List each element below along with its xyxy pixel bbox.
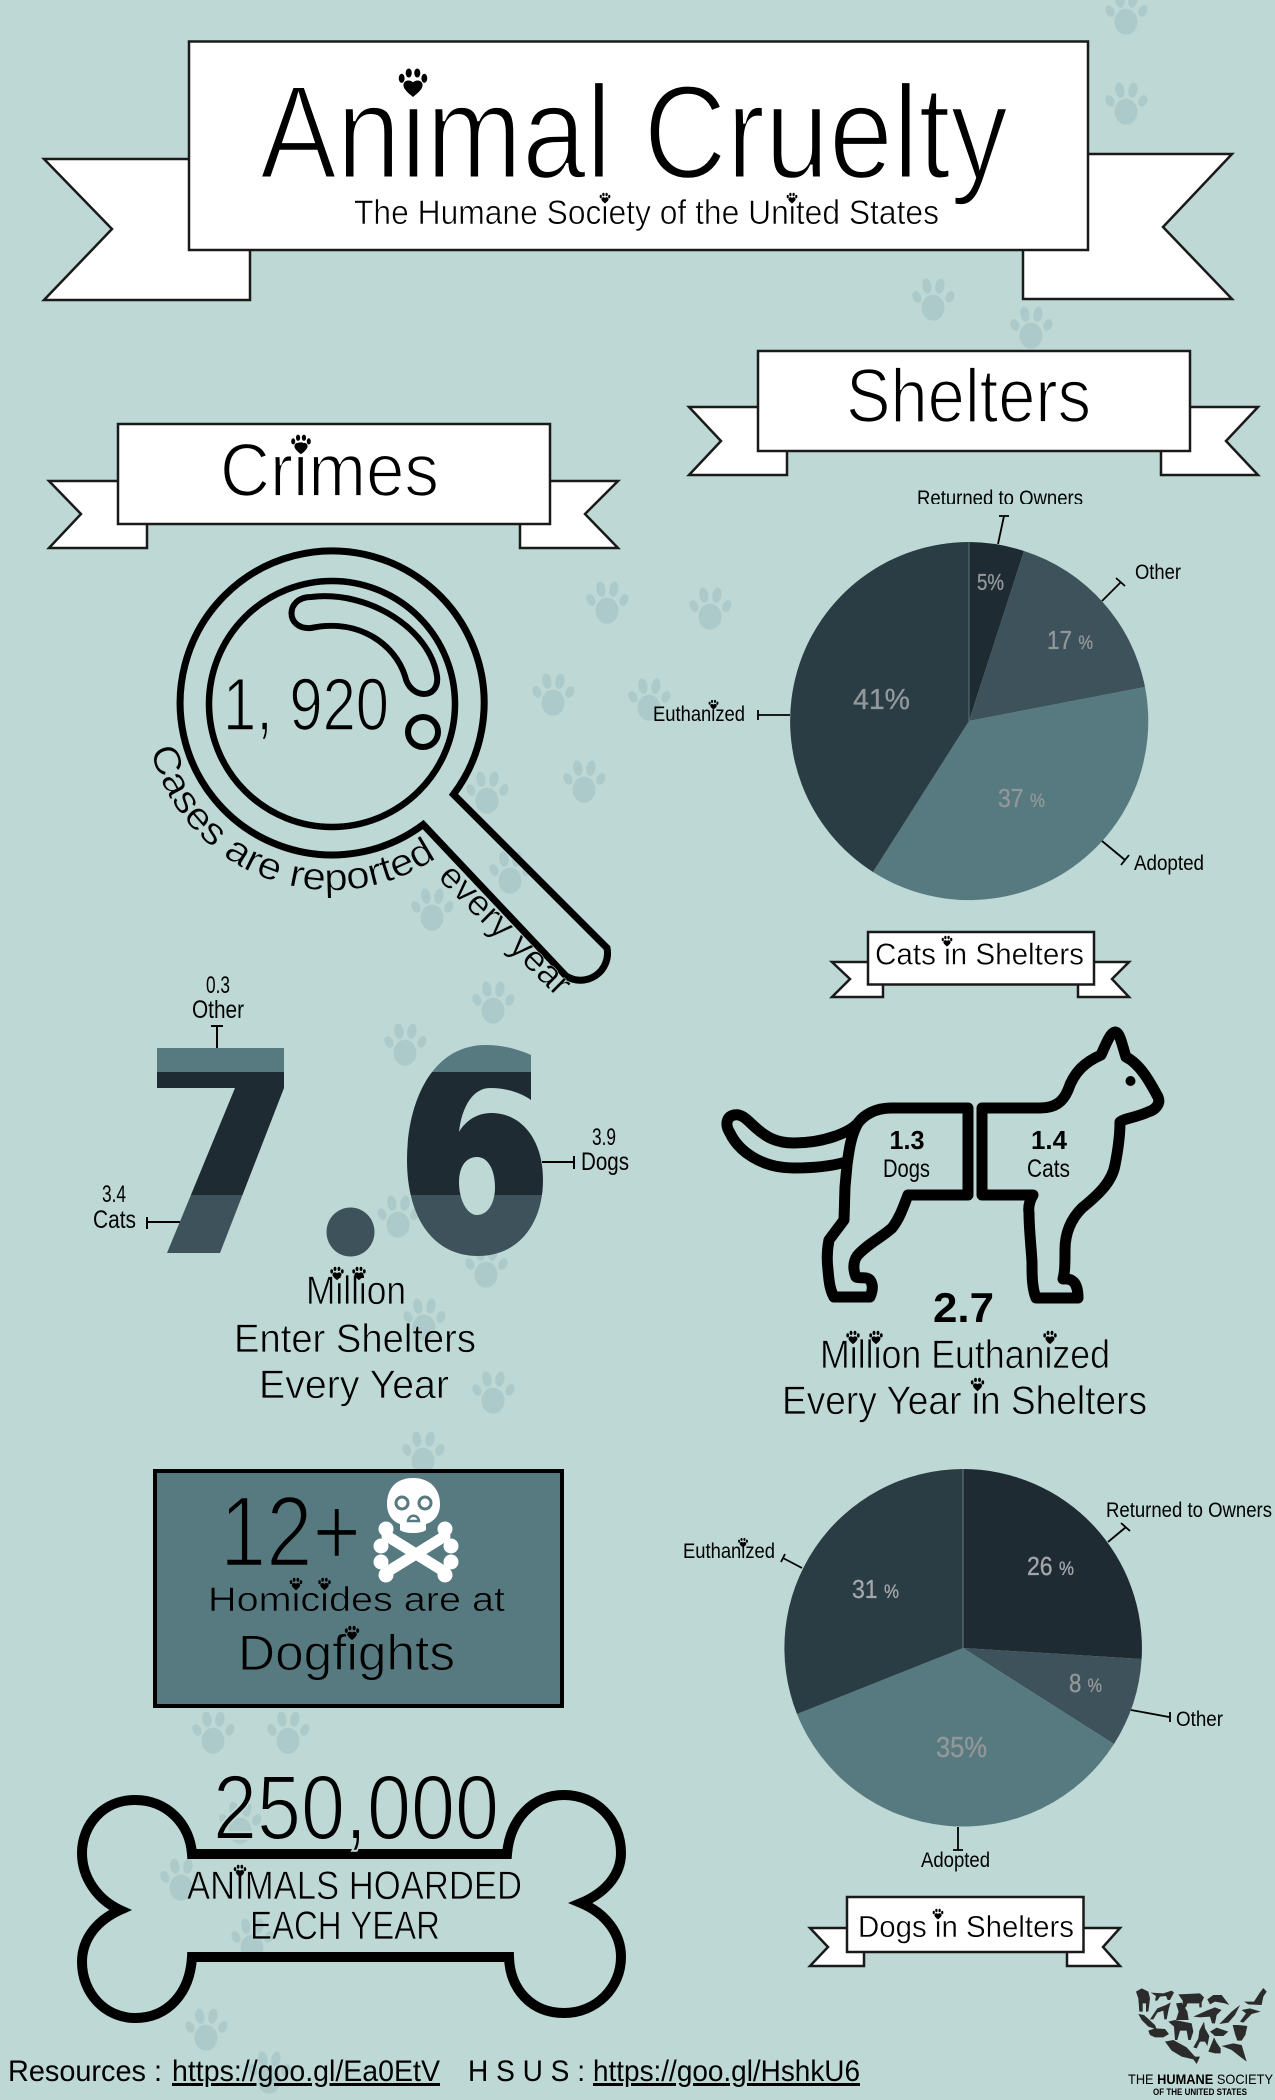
panel: dogfights — [155, 1471, 562, 1706]
pie labels: cats: Euthanized — [653, 703, 745, 726]
percent labels: 17 % — [1047, 625, 1093, 655]
pie chart: dogs in shelters — [784, 1469, 1142, 1827]
banner: dogs in shelters — [810, 1897, 1120, 1966]
label: other — [192, 972, 244, 1048]
caption: dogfights: Dogfights — [238, 1625, 455, 1681]
banner: cats in shelters — [832, 932, 1129, 997]
caption: animals hoarded: EACH YEAR — [250, 1904, 440, 1948]
caption: homicides: Homicides are at — [208, 1581, 506, 1619]
logo animals map — [1136, 1988, 1267, 2064]
percent labels: 31 % — [852, 1574, 899, 1604]
caption: million euthanized: Million Euthanized — [820, 1333, 1110, 1377]
logo subline: OF THE UNITED STATES — [1153, 2087, 1247, 2097]
stat: dogs euthanized: Dogs — [883, 1155, 930, 1183]
cat front half — [982, 1032, 1159, 1298]
pie labels: dogs — [683, 1499, 1272, 1872]
pie labels: cats: Other — [1135, 561, 1181, 584]
heading banner: shelters: Shelters — [846, 354, 1091, 439]
stat: 2.7: 2.7 — [933, 1284, 994, 1331]
heading banner: crimes — [49, 424, 618, 548]
background paw prints — [158, 0, 1149, 2094]
decimal point — [326, 1208, 374, 1256]
banner: dogs in shelters: Dogs in Shelters — [858, 1909, 1074, 1944]
magnifying glass — [180, 551, 608, 980]
label: dogs — [542, 1124, 629, 1176]
label: dogs: 3.9 — [592, 1124, 616, 1151]
pie labels: cats — [653, 487, 1204, 875]
resources line: https://goo.gl/HshkU6 — [593, 2055, 860, 2088]
resources line: H S U S : — [468, 2055, 585, 2088]
logo wordmark: THE HUMANE SOCIETY — [1128, 2071, 1274, 2087]
label: other: Other — [192, 996, 244, 1024]
pie labels: dogs: Adopted — [921, 1849, 990, 1872]
cat eye — [1126, 1076, 1136, 1086]
stat: cats euthanized — [1027, 1125, 1070, 1183]
stat: 1,920: 1, 920 — [223, 663, 389, 746]
label: cats — [93, 1181, 180, 1234]
bone outline — [82, 1795, 621, 2018]
resources line: https://goo.gl/Ea0EtV — [172, 2055, 440, 2088]
label: cats: Cats — [93, 1206, 136, 1234]
caption: million enter shelters: Million — [306, 1269, 406, 1313]
stat: dogs euthanized — [883, 1125, 930, 1183]
percent labels: 41% — [853, 684, 910, 716]
stat: cats euthanized: Cats — [1027, 1155, 1070, 1183]
percent labels: 37 % — [998, 783, 1045, 813]
chart: 7.6 million number — [157, 1045, 543, 1256]
percent labels: 8 % — [1069, 1668, 1102, 1698]
caption: million euthanized: Every Year in Shelters — [782, 1379, 1147, 1423]
digit 7 — [157, 1048, 284, 1253]
logo: humane society — [1128, 1988, 1274, 2097]
icons: paws on homicides text — [290, 1578, 359, 1640]
icons: subtitle paws — [600, 193, 797, 204]
caption: animals hoarded — [187, 1864, 522, 1948]
curved caption: along the lens: Cases are reported — [154, 746, 434, 898]
subtitle: The Humane Society of the United States — [354, 194, 939, 232]
title text: Animal Cruelty — [260, 59, 1008, 207]
caption: million enter shelters: Enter Shelters — [234, 1317, 476, 1361]
pie labels: dogs: Other — [1176, 1708, 1223, 1731]
stat: cats euthanized: 1.4 — [1031, 1125, 1068, 1155]
stat: 250,000: 250,000 — [213, 1757, 499, 1859]
caption: million enter shelters — [234, 1267, 476, 1407]
label: dogs: Dogs — [581, 1148, 629, 1176]
title banner — [44, 42, 1232, 300]
heading banner: crimes: Crimes — [220, 428, 439, 512]
percent labels — [853, 569, 1093, 813]
caption: million enter shelters: Every Year — [259, 1363, 449, 1407]
caption: million euthanized — [782, 1331, 1147, 1423]
pie labels: cats: Returned to Owners — [917, 487, 1083, 510]
caption: animals hoarded: ANIMALS HOARDED — [187, 1864, 522, 1908]
stat: 12+: 12+ — [220, 1476, 361, 1588]
icon: title paw — [399, 68, 427, 97]
resources line — [8, 2055, 860, 2088]
percent labels: 35% — [936, 1732, 987, 1764]
label: cats: 3.4 — [102, 1181, 126, 1208]
pie labels: dogs: Euthanized — [683, 1540, 775, 1563]
resources line: Resources : — [8, 2055, 162, 2088]
digit 6 — [407, 1045, 543, 1256]
percent labels — [852, 1551, 1102, 1764]
icon: crimes paw — [291, 435, 311, 454]
icon: skull and crossbones — [374, 1478, 458, 1582]
curved caption: along the handle: every year — [431, 855, 581, 1003]
heading banner: shelters — [689, 351, 1258, 475]
percent labels: 5% — [977, 569, 1004, 595]
label: other: 0.3 — [206, 972, 230, 999]
cat outline — [727, 1032, 1159, 1298]
percent labels: 26 % — [1027, 1551, 1074, 1581]
pie chart: cats in shelters — [790, 542, 1148, 900]
stat: dogs euthanized: 1.3 — [890, 1125, 924, 1155]
pie labels: cats: Adopted — [1134, 852, 1204, 875]
cat rear half — [727, 1108, 968, 1297]
banner: cats in shelters: Cats in Shelters — [875, 936, 1084, 972]
